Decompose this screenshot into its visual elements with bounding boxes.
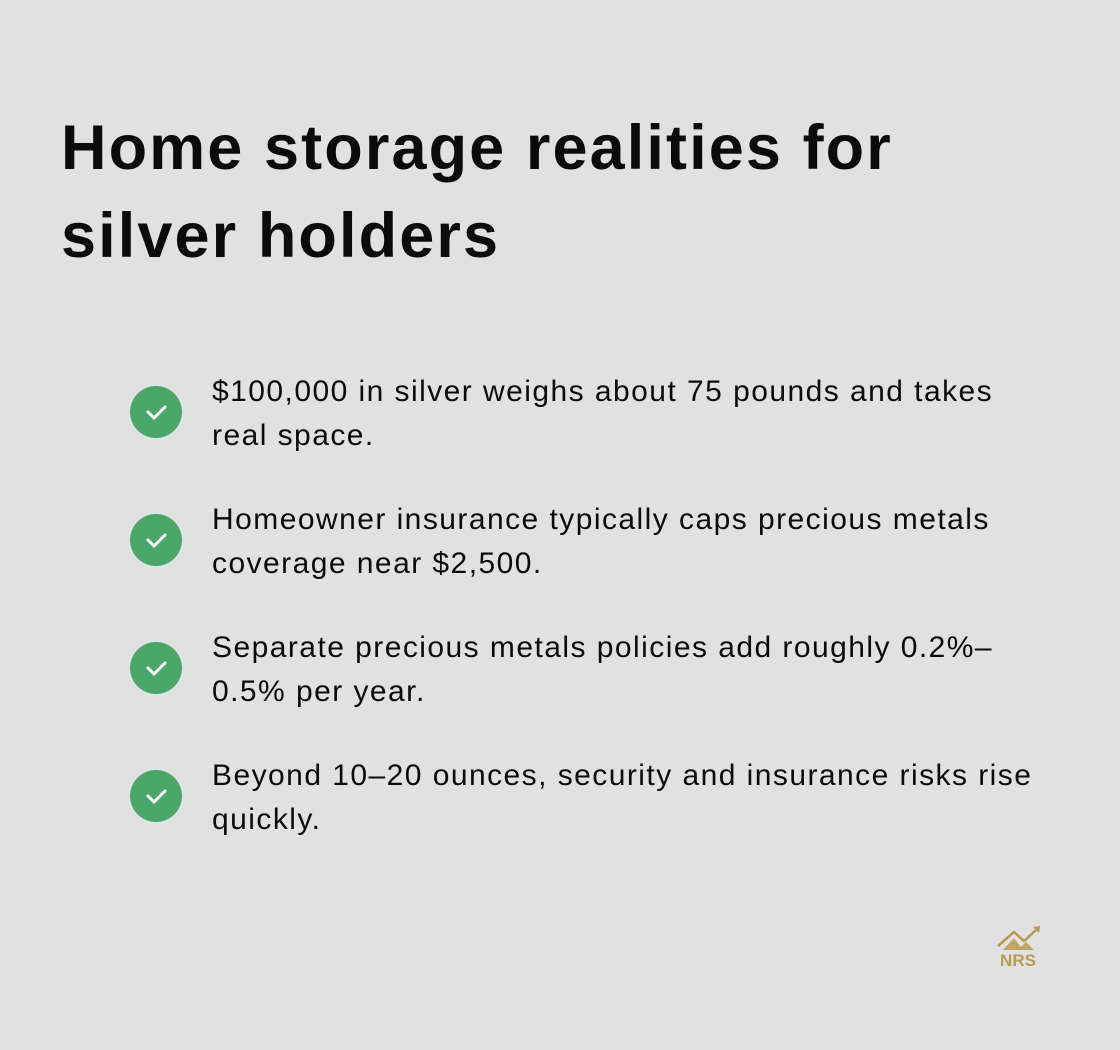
icon: check	[130, 386, 182, 438]
logo: NRS: NRS	[1000, 951, 1036, 970]
title: Home storage realities for	[61, 113, 893, 183]
text 2: coverage near $2,500.	[212, 547, 543, 580]
icon: check	[130, 514, 182, 566]
item 1	[130, 375, 993, 452]
text 1	[212, 375, 993, 452]
item 2	[130, 503, 990, 580]
text 2: Homeowner insurance typically caps precious metals	[212, 503, 990, 536]
text 4: Beyond 10–20 ounces, security and insurance risks rise	[212, 759, 1032, 792]
icon: check	[130, 642, 182, 694]
text 1: $100,000 in silver weighs about 75 pounds and takes	[212, 375, 993, 408]
text 3: 0.5% per year.	[212, 675, 426, 708]
text 4	[212, 759, 1032, 836]
title: silver holders	[61, 201, 500, 271]
title	[61, 113, 893, 271]
text 2	[212, 503, 990, 580]
icon: check	[130, 770, 182, 822]
text 3	[212, 631, 993, 708]
text 4: quickly.	[212, 803, 321, 836]
text 1: real space.	[212, 419, 375, 452]
text 3: Separate precious metals policies add roughly 0.2%–	[212, 631, 993, 664]
item 3	[130, 631, 993, 708]
logo: NRS	[997, 926, 1040, 970]
item 4	[130, 759, 1032, 836]
